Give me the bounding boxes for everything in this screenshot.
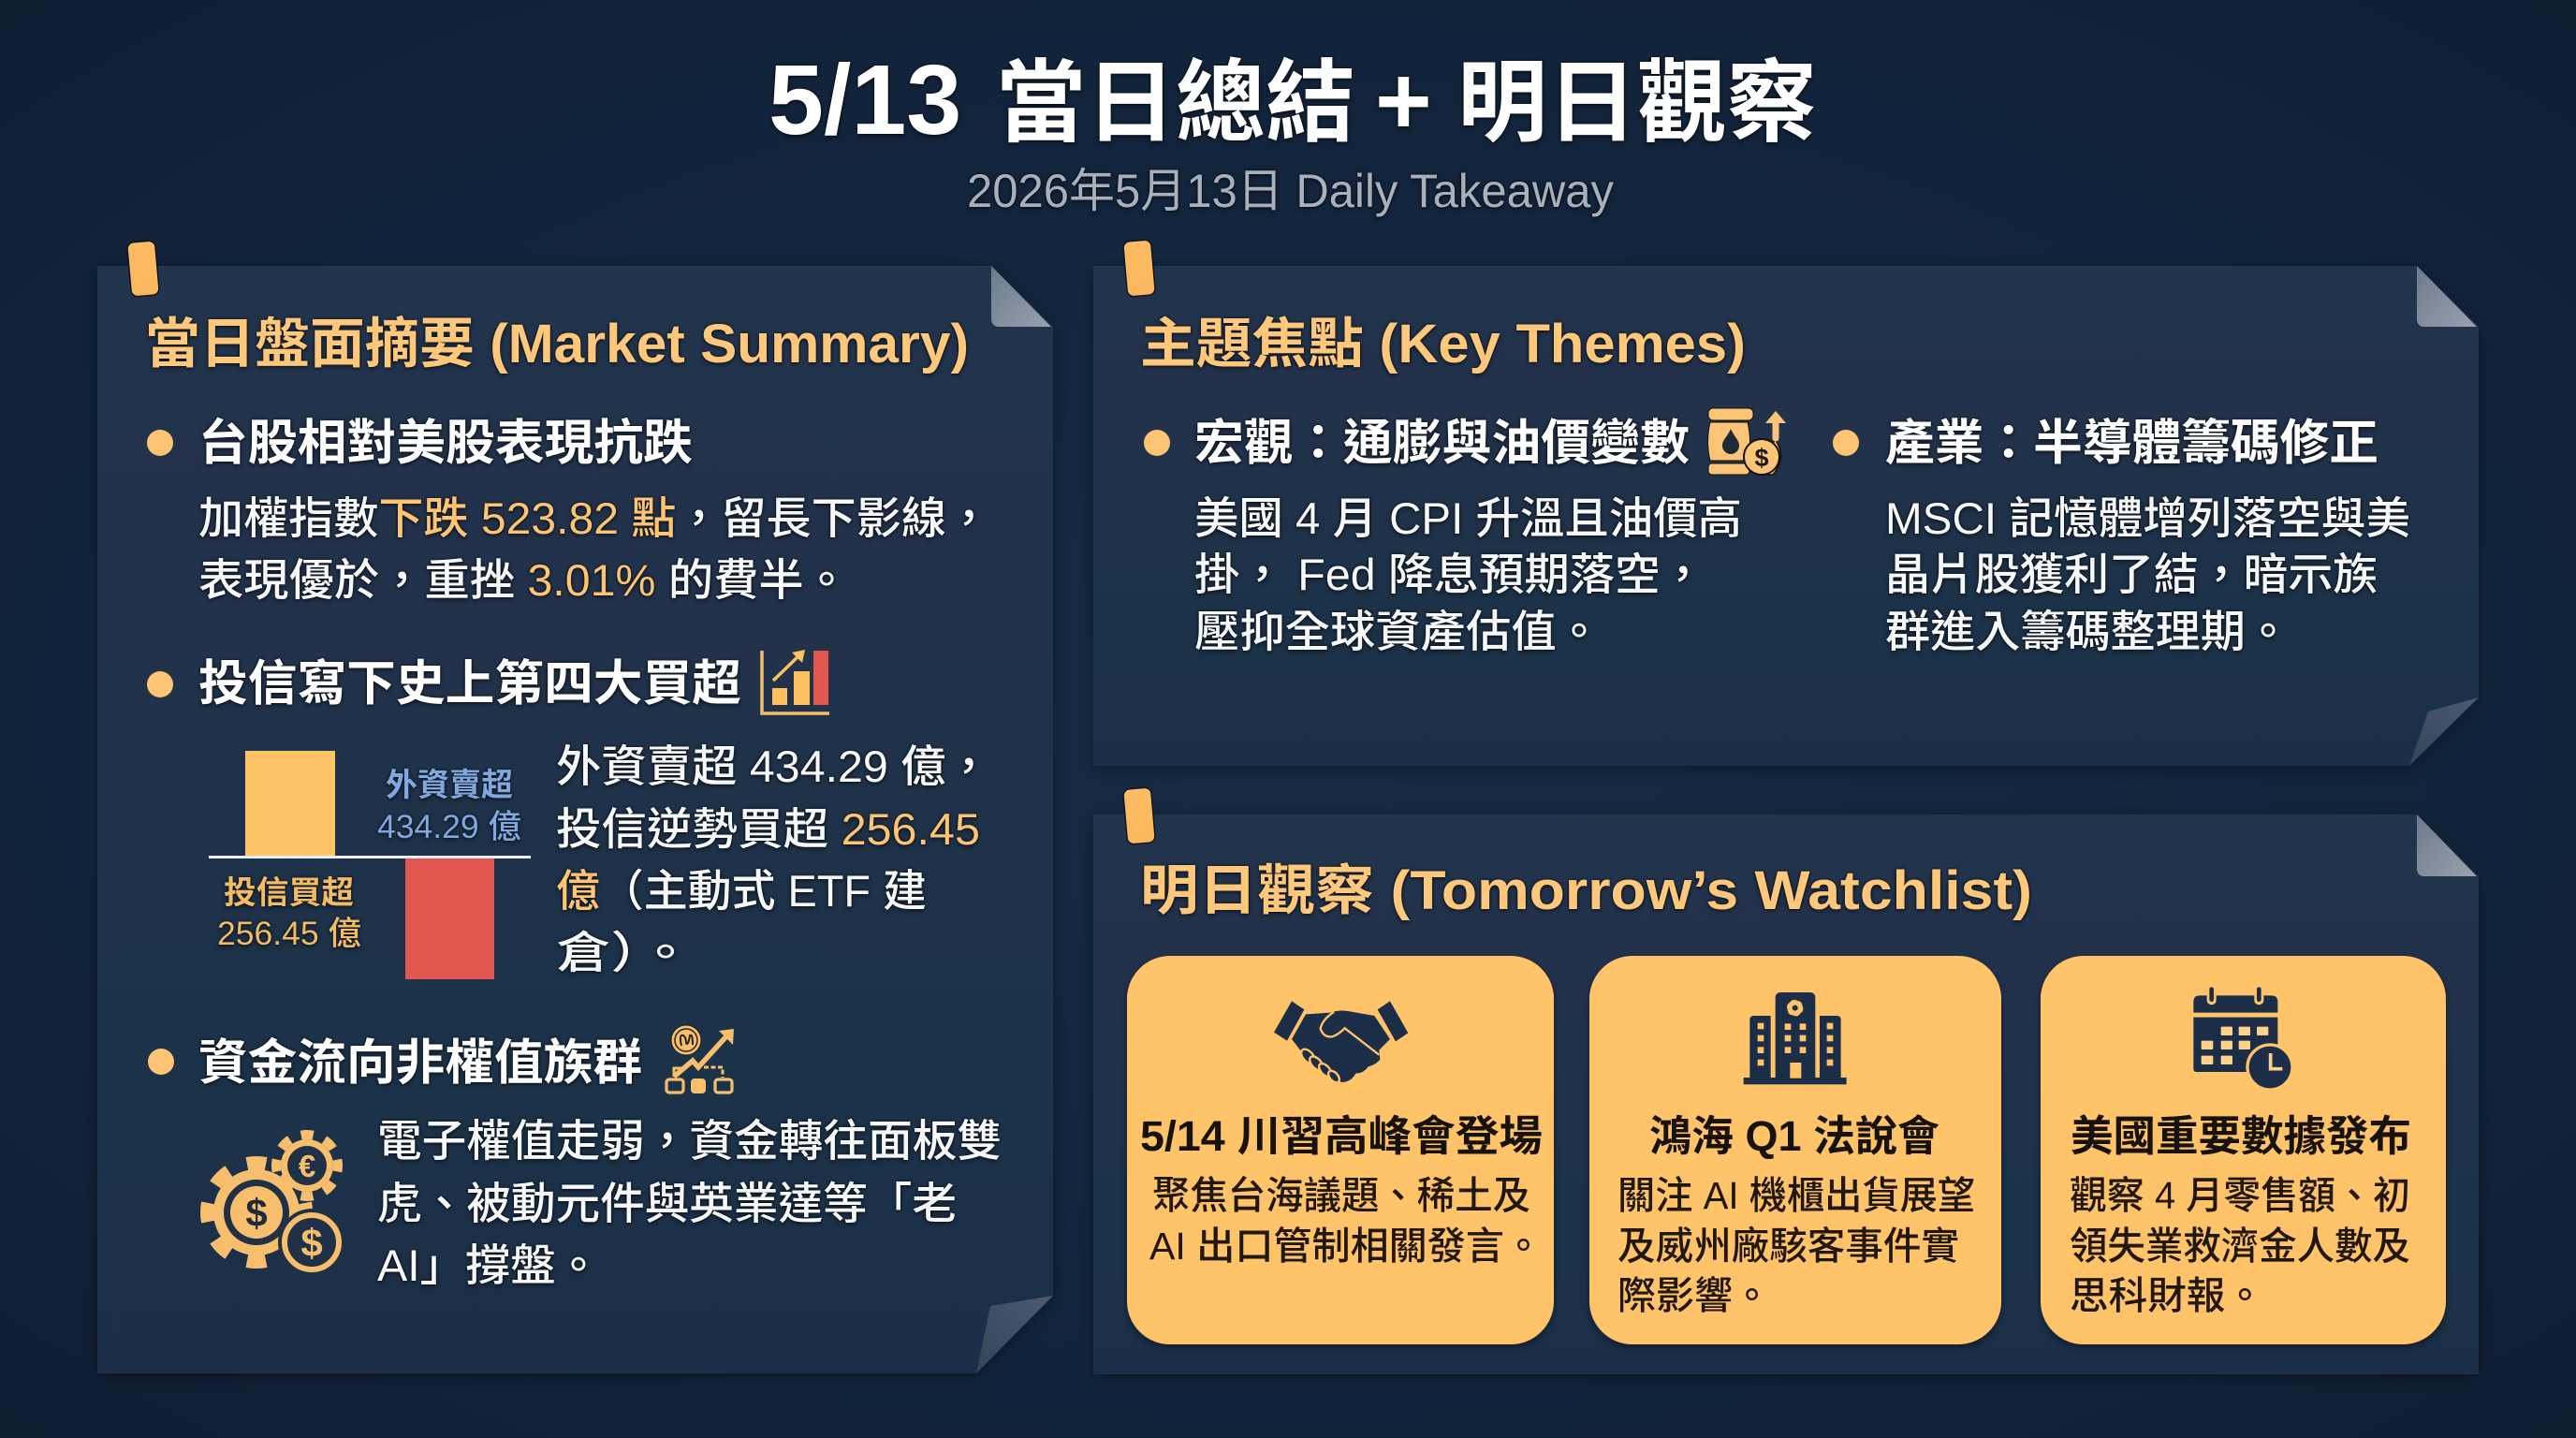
title: 5/13 — [768, 45, 961, 155]
icon: building — [1744, 992, 1847, 1084]
tape: market summary — [127, 241, 159, 297]
text: trust detail — [556, 741, 991, 977]
text: taiex detail: 加權指數下跌 523.82 點，留長下影線， — [198, 493, 991, 543]
icon: oil barrel and coin — [1707, 408, 1786, 475]
icon: handshake — [1274, 1001, 1408, 1084]
bullet: trust — [147, 671, 173, 697]
card text: us data: 思科財報。 — [2070, 1274, 2264, 1317]
bullet: industry — [1833, 430, 1859, 456]
card text: summit: AI 出口管制相關發言。 — [1149, 1225, 1543, 1268]
card title: hon hai: 鴻海 Q1 法說會 — [1649, 1112, 1939, 1160]
text: industry detail — [1885, 493, 2410, 656]
text: trust detail: 億（主動式 ETF 建 — [556, 866, 927, 916]
text: taiex detail — [198, 493, 991, 605]
icon: gears and coins — [208, 1135, 345, 1276]
heading: market summary: 當日盤面摘要 (Market Summary) — [145, 314, 969, 374]
panel: tomorrow watchlist — [1093, 787, 2479, 1374]
icon: oil barrel and coin: $ — [1754, 444, 1769, 472]
text: trust detail: 外資賣超 434.29 億， — [556, 741, 991, 791]
chart label: foreign — [377, 768, 521, 845]
card title: summit: 5/14 川習高峰會登場 — [1140, 1112, 1543, 1160]
icon: bar chart — [762, 650, 829, 713]
text: taiex detail: 表現優於，重挫 3.01% 的費半。 — [198, 555, 849, 605]
chart label: foreign: 434.29 億 — [377, 809, 521, 845]
panel: key themes — [1093, 240, 2479, 766]
title: + — [1375, 47, 1432, 155]
text: rotation detail: AI」撐盤。 — [377, 1240, 601, 1290]
heading: key themes: 主題焦點 (Key Themes) — [1140, 314, 1746, 374]
text: trust detail: 倉）。 — [556, 928, 693, 977]
panel: market summary — [97, 241, 1053, 1373]
text: macro detail — [1194, 493, 1742, 656]
title: 明日觀察 — [1457, 53, 1817, 154]
heading: watchlist: 明日觀察 (Tomorrow’s Watchlist) — [1140, 860, 2032, 921]
chart label: trust: 256.45 億 — [217, 916, 361, 952]
card: hon hai — [1589, 956, 2001, 1344]
text: industry detail: 晶片股獲利了結，暗示族 — [1885, 550, 2378, 599]
bullet: taiex — [147, 430, 173, 456]
card: summit — [1127, 956, 1554, 1344]
card text: hon hai: 關注 AI 機櫃出貨展望 — [1617, 1174, 1975, 1217]
card text: us data: 領失業救濟金人數及 — [2070, 1225, 2410, 1268]
subheading: taiex: 台股相對美股表現抗跌 — [198, 417, 693, 471]
card text: summit — [1149, 1174, 1543, 1268]
card text: hon hai — [1617, 1174, 1975, 1317]
icon: gears and coins: $ — [245, 1191, 268, 1235]
chart label: trust: 投信買超 — [224, 875, 354, 911]
card text: us data: 觀察 4 月零售額、初 — [2070, 1174, 2410, 1217]
chart: fund flow bars — [209, 751, 531, 979]
chart label: foreign: 外資賣超 — [386, 768, 513, 803]
tape: watchlist — [1123, 787, 1156, 844]
card text: hon hai: 及威州廠駭客事件實 — [1617, 1225, 1959, 1268]
card text: summit: 聚焦台海議題、稀土及 — [1152, 1174, 1530, 1217]
subtitle: 2026年5月13日 Daily Takeaway — [967, 165, 1614, 217]
chart label: trust — [217, 875, 361, 952]
text: industry detail: MSCI 記憶體增列落空與美 — [1885, 493, 2410, 543]
bullet: macro — [1144, 430, 1170, 456]
text: trust detail: 投信逆勢買超 256.45 — [556, 804, 980, 854]
icon: gears and coins: $ — [300, 1221, 323, 1265]
icon: capital flow — [666, 1025, 734, 1093]
text: macro detail: 掛， Fed 降息預期落空， — [1194, 550, 1705, 599]
text: rotation detail — [377, 1116, 1002, 1290]
tape: key themes — [1123, 240, 1156, 297]
text: industry detail: 群進入籌碼整理期。 — [1885, 607, 2291, 656]
text: rotation detail: 虎、被動元件與英業達等「老 — [377, 1179, 957, 1228]
subheading: rotation: 資金流向非權值族群 — [198, 1036, 642, 1091]
subheading: macro: 宏觀：通膨與油價變數 — [1194, 417, 1690, 471]
card: us data — [2041, 956, 2446, 1344]
icon: gears and coins: € — [299, 1149, 315, 1183]
icon: calendar with clock — [2193, 988, 2292, 1090]
title: 當日總結 — [996, 53, 1355, 154]
text: rotation detail: 電子權值走弱，資金轉往面板雙 — [377, 1116, 1002, 1166]
text: macro detail: 壓抑全球資產估值。 — [1194, 607, 1602, 656]
card title: us data: 美國重要數據發布 — [2071, 1112, 2411, 1160]
card text: us data — [2070, 1174, 2410, 1317]
subheading: industry: 產業：半導體籌碼修正 — [1885, 417, 2378, 471]
subheading: trust buying: 投信寫下史上第四大買超 — [198, 657, 741, 712]
bullet: rotation — [148, 1049, 174, 1075]
card text: hon hai: 際影響。 — [1617, 1274, 1771, 1317]
text: macro detail: 美國 4 月 CPI 升溫且油價高 — [1194, 493, 1742, 543]
